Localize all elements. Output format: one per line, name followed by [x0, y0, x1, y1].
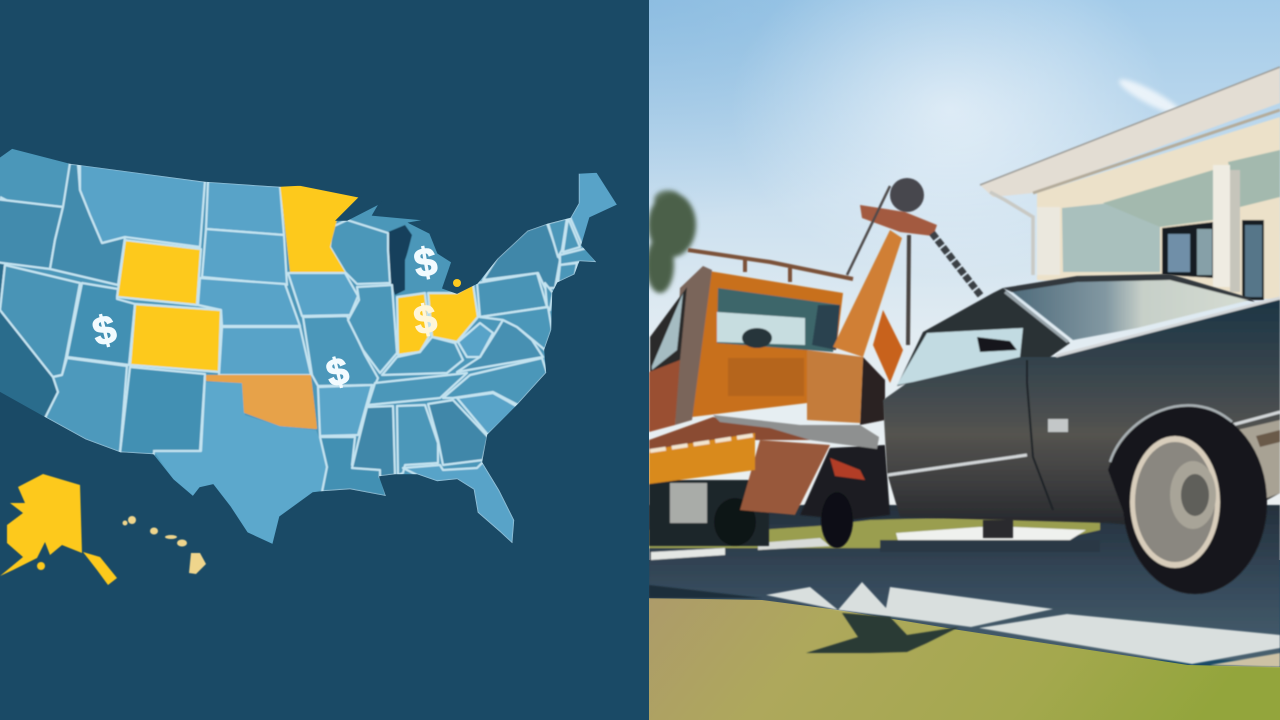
ground: driveway and shadow: [649, 505, 1280, 660]
truck lower chassis and wheels: [649, 445, 890, 548]
truck cab: [649, 266, 903, 432]
porch columns: [1037, 207, 1060, 275]
house: [980, 67, 1280, 300]
porch windows: [1162, 222, 1213, 278]
car: [883, 274, 1280, 594]
chrome trim lines: [888, 298, 1280, 475]
car jack support: [983, 520, 1013, 538]
side window: [897, 328, 1023, 385]
tan wall band: [1037, 117, 1280, 300]
tow boom and crossbar: [807, 178, 937, 423]
truck roof rack: [688, 250, 853, 282]
dollar sign: Indiana: $: [411, 296, 440, 344]
panel: tow truck photo: [649, 0, 1280, 720]
Hawaii: [122, 516, 206, 574]
highlighted state: Oklahoma orange: [207, 376, 316, 428]
truck bed and rust panel: [649, 415, 880, 515]
car body: [883, 298, 1280, 525]
state group: northeast: [477, 172, 618, 350]
tree: [646, 190, 696, 293]
dollar sign: Utah: $: [88, 307, 121, 355]
state group: midwest: [330, 220, 463, 375]
concrete slabs: [766, 582, 1280, 667]
porch ceiling: [1103, 170, 1213, 227]
tow truck: [649, 178, 981, 548]
mirror: [977, 337, 1017, 352]
sky: [649, 0, 1280, 560]
rear quarter panel: [1237, 420, 1280, 500]
grass lawn: [649, 598, 1280, 720]
state group: south: [352, 320, 547, 545]
tail light: [1256, 430, 1280, 447]
Alaska: [0, 474, 117, 585]
state group: west: [0, 148, 205, 455]
highlighted states: gold: [117, 184, 478, 372]
rear window: [1010, 280, 1250, 340]
map of contiguous states: [0, 148, 618, 545]
panel: US map: [0, 148, 617, 586]
car wheel: [1108, 405, 1267, 594]
door seam: [1027, 360, 1053, 510]
dollar sign: Missouri: $: [322, 350, 353, 396]
Lake Erie islet dot: [453, 279, 461, 287]
siding: [1062, 203, 1160, 272]
dollar sign: Michigan: $: [411, 239, 440, 287]
shadow on lawn: [649, 585, 959, 653]
roof eave: [980, 67, 1280, 197]
car roof pillar: [897, 288, 1070, 386]
ocean mask trimming outer coast strokes: [0, 0, 659, 720]
state group: plains: [153, 181, 387, 545]
tow chain: [932, 233, 981, 296]
rear door badge: [1048, 419, 1068, 432]
